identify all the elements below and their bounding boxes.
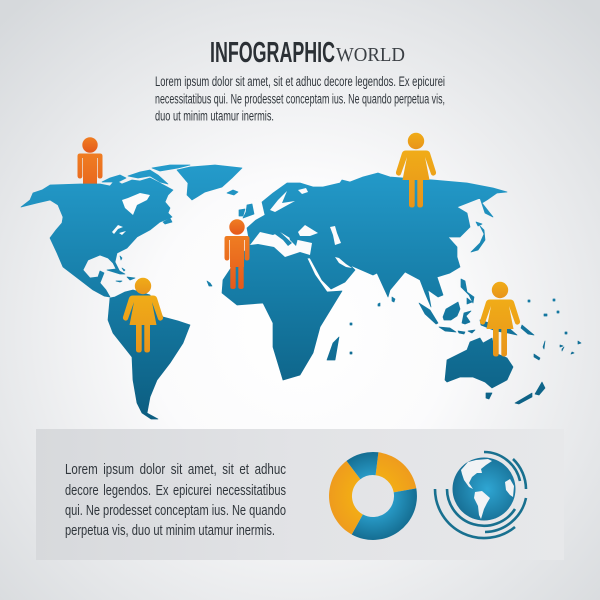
icon: woman pin over Russia: [396, 133, 436, 208]
Borneo: [443, 302, 460, 320]
panel text block: decore legendos. Ex epicurei necessitatibus: [65, 483, 286, 499]
seas and lakes cut into the map: [112, 188, 352, 268]
Iceland: [227, 190, 238, 195]
New Zealand: [515, 382, 545, 404]
Persian Gulf: [335, 257, 352, 268]
icon: woman pin over South America: [123, 278, 163, 352]
icon: globe with orbit rings: [435, 452, 526, 538]
Eurasia and Africa: [222, 173, 507, 380]
intro text block: duo ut minim utamur inermis.: [155, 108, 274, 124]
Arctic islands: [102, 165, 190, 184]
Madagascar: [327, 337, 339, 360]
Japan: [471, 222, 485, 252]
globe continents: [461, 459, 514, 519]
Black Sea: [298, 225, 318, 236]
Philippines: [461, 279, 474, 304]
Great Lakes: [112, 225, 126, 235]
Sumatra: [419, 303, 438, 324]
Greenland: [177, 165, 242, 200]
title: INFOGRAPHIC: [210, 37, 335, 69]
world map: [21, 165, 581, 419]
donut chart: [329, 452, 417, 540]
panel: bottom info: [36, 429, 564, 560]
North America: [21, 178, 173, 297]
Baltic Sea: [270, 191, 295, 212]
South America: [108, 290, 190, 419]
Newfoundland: [163, 218, 172, 224]
Celebes: [462, 311, 471, 324]
Pacific islands: [120, 256, 581, 360]
Caspian Sea: [330, 226, 341, 245]
title: WORLD: [336, 44, 405, 66]
Italy and Balkans: [272, 230, 298, 246]
Australia: [445, 338, 513, 388]
Mediterranean Sea: [250, 232, 312, 257]
Hudson Bay: [122, 193, 150, 215]
Java and Lesser Sunda: [439, 327, 475, 334]
orbit rings: [435, 452, 526, 538]
intro text block: [155, 74, 445, 124]
panel text block: perpetua vis, duo ut minim utamur inermis.: [65, 523, 275, 539]
icon: woman pin over Australia: [480, 282, 520, 356]
panel text block: Lorem ipsum dolor sit amet, sit et adhuc: [65, 462, 286, 478]
New Guinea: [480, 320, 534, 335]
Sri Lanka: [392, 297, 395, 302]
icon: man pin over West Africa: [224, 219, 250, 289]
icon: man pin over Canada: [78, 137, 102, 207]
intro text block: Lorem ipsum dolor sit amet, sit et adhuc decore legendos. Ex epicurei: [155, 74, 445, 89]
Caribbean islands: [107, 269, 135, 282]
panel text block: [65, 462, 286, 539]
intro text block: necessitatibus qui. Ne prodesset conceptam ius. Ne quando perpetua vis,: [155, 92, 445, 106]
UK and Ireland: [239, 204, 254, 218]
panel text block: qui. Ne prodesset conceptam ius. Ne quando: [65, 503, 286, 519]
Barents inlet: [298, 188, 308, 194]
Tasmania: [486, 393, 492, 399]
